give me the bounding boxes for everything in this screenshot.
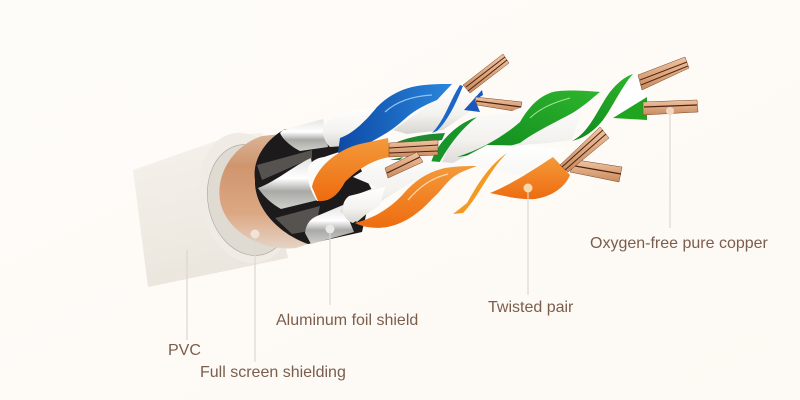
upper orange wire xyxy=(312,138,390,201)
callout: aluminum foil shield: Aluminum foil shield xyxy=(276,312,418,329)
orange twisted main xyxy=(490,157,570,199)
green back tip xyxy=(390,157,403,168)
shield sheen xyxy=(257,150,320,234)
blue stripe xyxy=(432,85,463,133)
green wire xyxy=(457,90,600,157)
white conductor behind top tube xyxy=(323,108,400,147)
callout: PVC xyxy=(168,250,201,359)
blue wire xyxy=(338,84,452,156)
callout: PVC: PVC xyxy=(168,342,201,359)
green wire back part xyxy=(397,133,445,146)
callout: aluminum foil shield xyxy=(276,224,418,329)
blue highlight xyxy=(385,95,432,112)
white core above twisted orange xyxy=(340,145,567,222)
blue end stub xyxy=(464,90,483,112)
foil shield tubes xyxy=(258,108,400,244)
lower orange wire xyxy=(355,166,477,228)
callout: full screen shielding: Full screen shielding xyxy=(200,364,346,381)
green stripe xyxy=(430,117,477,168)
orange stripe xyxy=(453,153,507,214)
white core right of stripe xyxy=(613,75,647,117)
green stripe right xyxy=(572,74,633,141)
white conductor behind middle tube xyxy=(307,150,345,201)
full screen shielding braid xyxy=(219,130,320,248)
middle foil tube xyxy=(258,158,318,209)
lower orange highlight xyxy=(408,174,448,200)
green stub xyxy=(613,97,647,120)
copper strands: green pair xyxy=(638,57,698,115)
copper strands: orange pair xyxy=(385,127,622,182)
green white wire body xyxy=(432,93,600,170)
callout: twisted pair xyxy=(488,184,574,316)
inner collar xyxy=(197,136,303,264)
callout: twisted pair: Twisted pair xyxy=(488,299,574,316)
top foil tube xyxy=(280,119,328,151)
green highlight xyxy=(530,98,570,118)
callout: full screen shielding xyxy=(200,230,346,381)
copper strands: blue pair xyxy=(463,54,522,112)
callout: oxygen-free pure copper xyxy=(590,107,769,252)
black shield layer xyxy=(255,129,372,244)
callout: oxygen-free pure copper: Oxygen-free pure copper xyxy=(590,235,769,252)
PVC jacket xyxy=(133,133,288,287)
jacket end ring xyxy=(187,124,305,272)
bottom foil tube xyxy=(305,205,354,244)
cable illustration xyxy=(133,54,698,287)
lower white tube xyxy=(343,187,385,223)
white core under blue wire xyxy=(393,85,475,134)
